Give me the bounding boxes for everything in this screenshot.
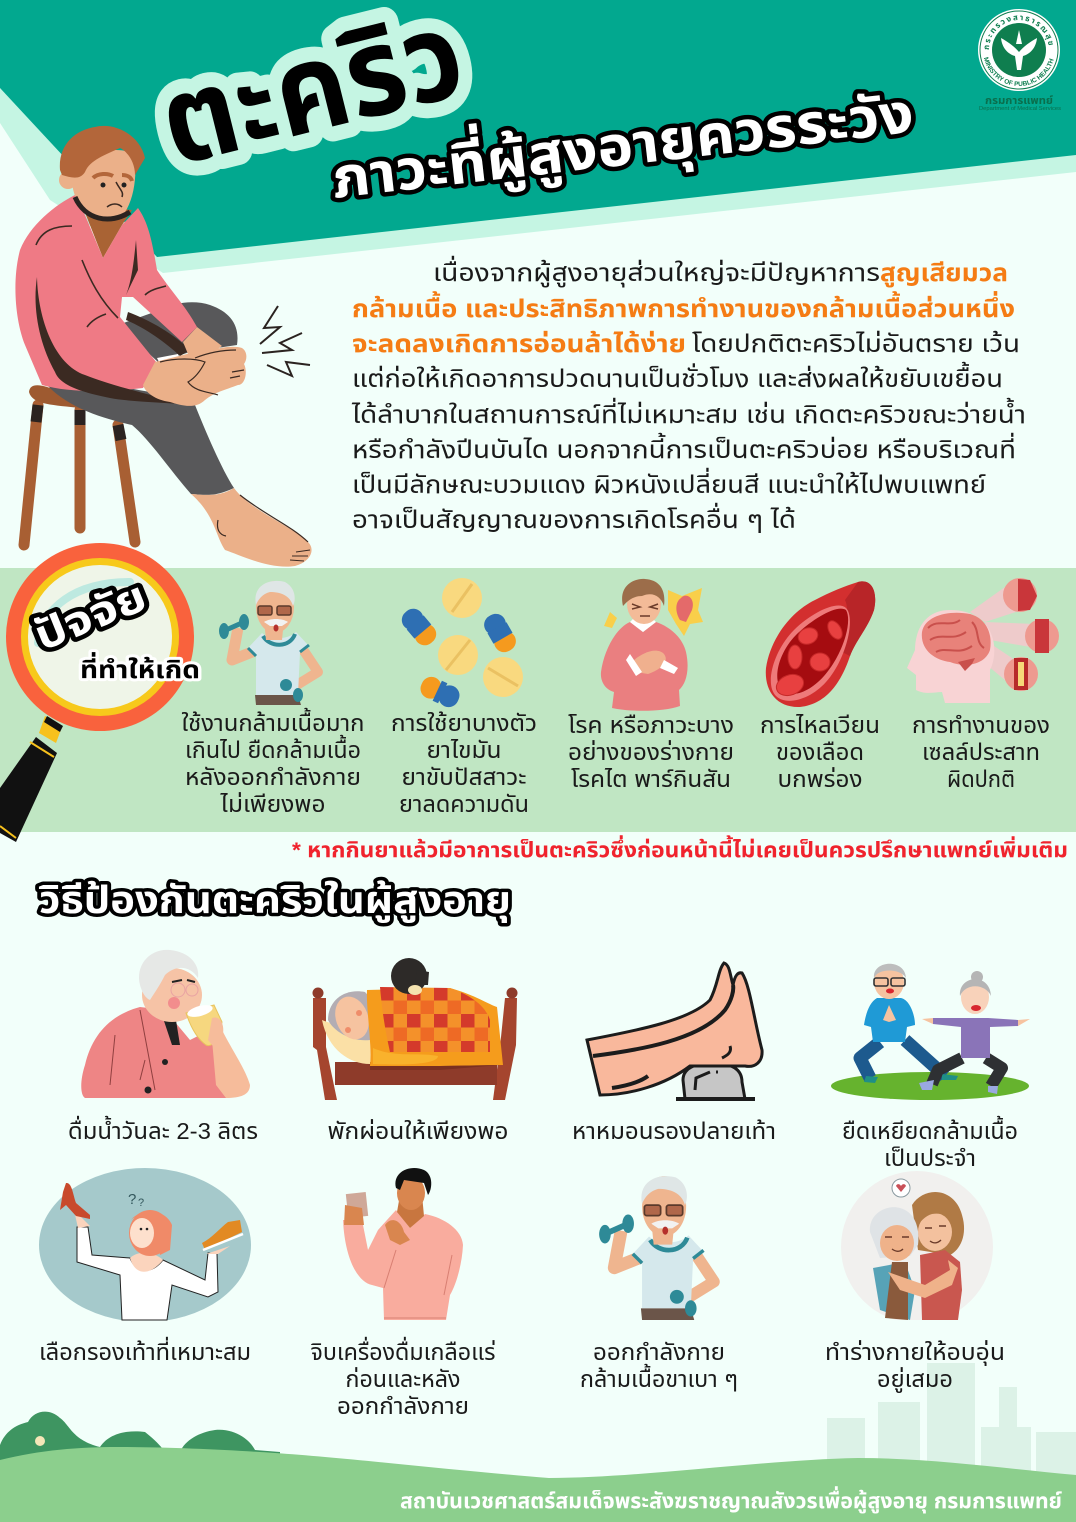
caption: medication: การใช้ยาบางตัว (391, 710, 537, 736)
caption: electrolyte drink: ก่อนและหลัง (346, 1366, 460, 1392)
heading: prevention: วิธีป้องกันตะคริวในผู้สูงอายุ (38, 880, 511, 923)
magnifier badge (0, 543, 194, 842)
intro paragraph: อาจเป็นสัญญาณของการเกิดโรคอื่น ๆ ได้ (352, 502, 796, 534)
caption: foot pillow: หาหมอนรองปลายเท้า (572, 1118, 776, 1144)
caption: stretching: เป็นประจำ (884, 1145, 976, 1171)
intro paragraph (351, 255, 1026, 534)
caption: muscle overuse: เกินไป ยืดกล้ามเนื้อ (185, 734, 361, 763)
logo: ministry seal: กระทรวงสาธารณสุข (984, 15, 1053, 50)
icon: woman choosing shoes: ? (138, 1197, 144, 1209)
caption: medication: ยาไขมัน (426, 737, 502, 763)
intro paragraph: เนื่องจากผู้สูงอายุส่วนใหญ่จะมีปัญหาการ (433, 255, 880, 288)
caption: nerve cells (912, 712, 1050, 792)
icon: brain and nerves (907, 578, 1059, 703)
icon: feet on pillow (587, 963, 762, 1099)
caption: illness (568, 712, 734, 792)
footer scenery: city silhouette (827, 1363, 1076, 1482)
illustration: man with leg cramp on stool (15, 126, 312, 567)
caption: muscle overuse: ใช้งานกล้ามเนื้อมาก (182, 707, 364, 736)
icon: elderly couple stretching (831, 964, 1030, 1100)
intro paragraph: ได้ลำบากในสถานการณ์ที่ไม่เหมาะสม เช่น เกิดตะคริวขณะว่ายน้ำ (351, 397, 1026, 429)
caption: leg exercise: ออกกำลังกาย (593, 1339, 725, 1365)
icon: elderly person sleeping under blanket with cat (312, 958, 518, 1100)
caption: medication: ยาลดความดัน (399, 791, 529, 817)
caption: choosing shoes: เลือกรองเท้าที่เหมาะสม (39, 1336, 251, 1365)
caption: circulation (760, 712, 880, 792)
icon: old man exercising large (599, 1176, 714, 1320)
caption: circulation: ของเลือด (776, 739, 864, 765)
caption: electrolyte drink (310, 1336, 496, 1419)
footer credit: สถาบันเวชศาสตร์สมเด็จพระสังฆราชญาณสังวรเพื่อผู้สูงอายุ กรมการแพทย์ (400, 1486, 1062, 1514)
logo: ministry seal: MINISTRY OF PUBLIC HEALTH (984, 57, 1054, 86)
icon: old man exercising (219, 581, 318, 705)
caption: muscle overuse (182, 707, 364, 817)
intro paragraph: เป็นมีลักษณะบวมแดง ผิวหนังเปลี่ยนสี แนะนำให้ไปพบแพทย์ (352, 467, 986, 499)
subtitle: ภาวะที่ผู้สูงอายุควรระวัง (327, 73, 917, 213)
caption: keep warm (825, 1339, 1005, 1394)
subheading: factors: ที่ทำให้เกิด (80, 652, 200, 684)
intro paragraph: หรือกำลังปีนบันได นอกจากนี้การเป็นตะคริวบ่อย หรือบริเวณที่ (352, 432, 1016, 464)
caption: rest: พักผ่อนให้เพียงพอ (328, 1118, 508, 1144)
caption: medication (391, 710, 537, 817)
logo: ministry seal (978, 9, 1060, 91)
caption: electrolyte drink: ออกกำลังกาย (337, 1393, 469, 1419)
caption: illness: โรคไต พาร์กินสัน (571, 766, 731, 792)
footer hill (0, 1447, 1076, 1522)
icon: pain sparks (260, 306, 310, 376)
caption: circulation: การไหลเวียน (760, 712, 880, 738)
caption: keep warm: อยู่เสมอ (877, 1366, 953, 1394)
logo caption: กรมการแพทย์ (985, 95, 1053, 107)
intro paragraph: แต่ก่อให้เกิดอาการปวดนานเป็นชั่วโมง และส่งผลให้ขยับเขยื้อน (352, 361, 1003, 393)
caption: medication: ยาขับปัสสาวะ (402, 764, 526, 790)
caption: muscle overuse: ไม่เพียงพอ (219, 791, 326, 817)
caption: nerve cells: ผิดปกติ (947, 766, 1015, 792)
icon: elderly woman drinking water (81, 950, 250, 1098)
caption: nerve cells: การทำงานของ (912, 712, 1050, 738)
icon: blood vessel (766, 581, 875, 707)
footer scenery: bushes (0, 1412, 280, 1470)
caption: illness: อย่างของร่างกาย (568, 739, 734, 765)
caption: muscle overuse: หลังออกกำลังกาย (185, 764, 361, 790)
icon: pills (398, 578, 523, 710)
caption: leg exercise (580, 1339, 738, 1392)
caption: electrolyte drink: จิบเครื่องดื่มเกลือแร่ (310, 1336, 496, 1365)
caption: leg exercise: กล้ามเนื้อขาเบา ๆ (580, 1363, 738, 1392)
caption: illness: โรค หรือภาวะบาง (568, 712, 734, 738)
intro paragraph: กล้ามเนื้อ และประสิทธิภาพการทำงานของกล้ามเนื้อส่วนหนึ่ง (352, 291, 1015, 323)
icon: woman choosing shoes (39, 1168, 251, 1322)
caption: circulation: บกพร่อง (778, 766, 862, 792)
logo caption: Department of Medical Services (979, 106, 1062, 112)
icon: hug keeping warm (841, 1171, 993, 1323)
intro paragraph: จะลดลงเกิดการอ่อนล้าได้ง่าย (352, 330, 686, 358)
header banner (0, 0, 1076, 273)
caption: keep warm: ทำร่างกายให้อบอุ่น (825, 1339, 1005, 1366)
intro paragraph: สูญเสียมวล (880, 259, 1008, 288)
caption: stretching (842, 1115, 1018, 1171)
panel: causes background (0, 568, 1076, 832)
icon: man sipping electrolyte drink (343, 1168, 463, 1320)
intro paragraph: โดยปกติตะคริวไม่อันตราย เว้น (692, 330, 1020, 358)
caption: stretching: ยืดเหยียดกล้ามเนื้อ (842, 1115, 1018, 1144)
caption: nerve cells: เซลล์ประสาท (922, 739, 1040, 765)
icon: woman choosing shoes: ? (128, 1191, 136, 1208)
caption: drink water: ดื่มน้ำวันละ 2-3 ลิตร (68, 1115, 258, 1144)
warning note: * หากกินยาแล้วมีอาการเป็นตะคริวซึ่งก่อนหน้านี้ไม่เคยเป็นควรปรึกษาแพทย์เพิ่มเติม (292, 835, 1068, 862)
logo caption (979, 95, 1062, 112)
heading: factors: ปัจจัย (28, 572, 153, 659)
icon: woman with chest pain (601, 579, 703, 711)
